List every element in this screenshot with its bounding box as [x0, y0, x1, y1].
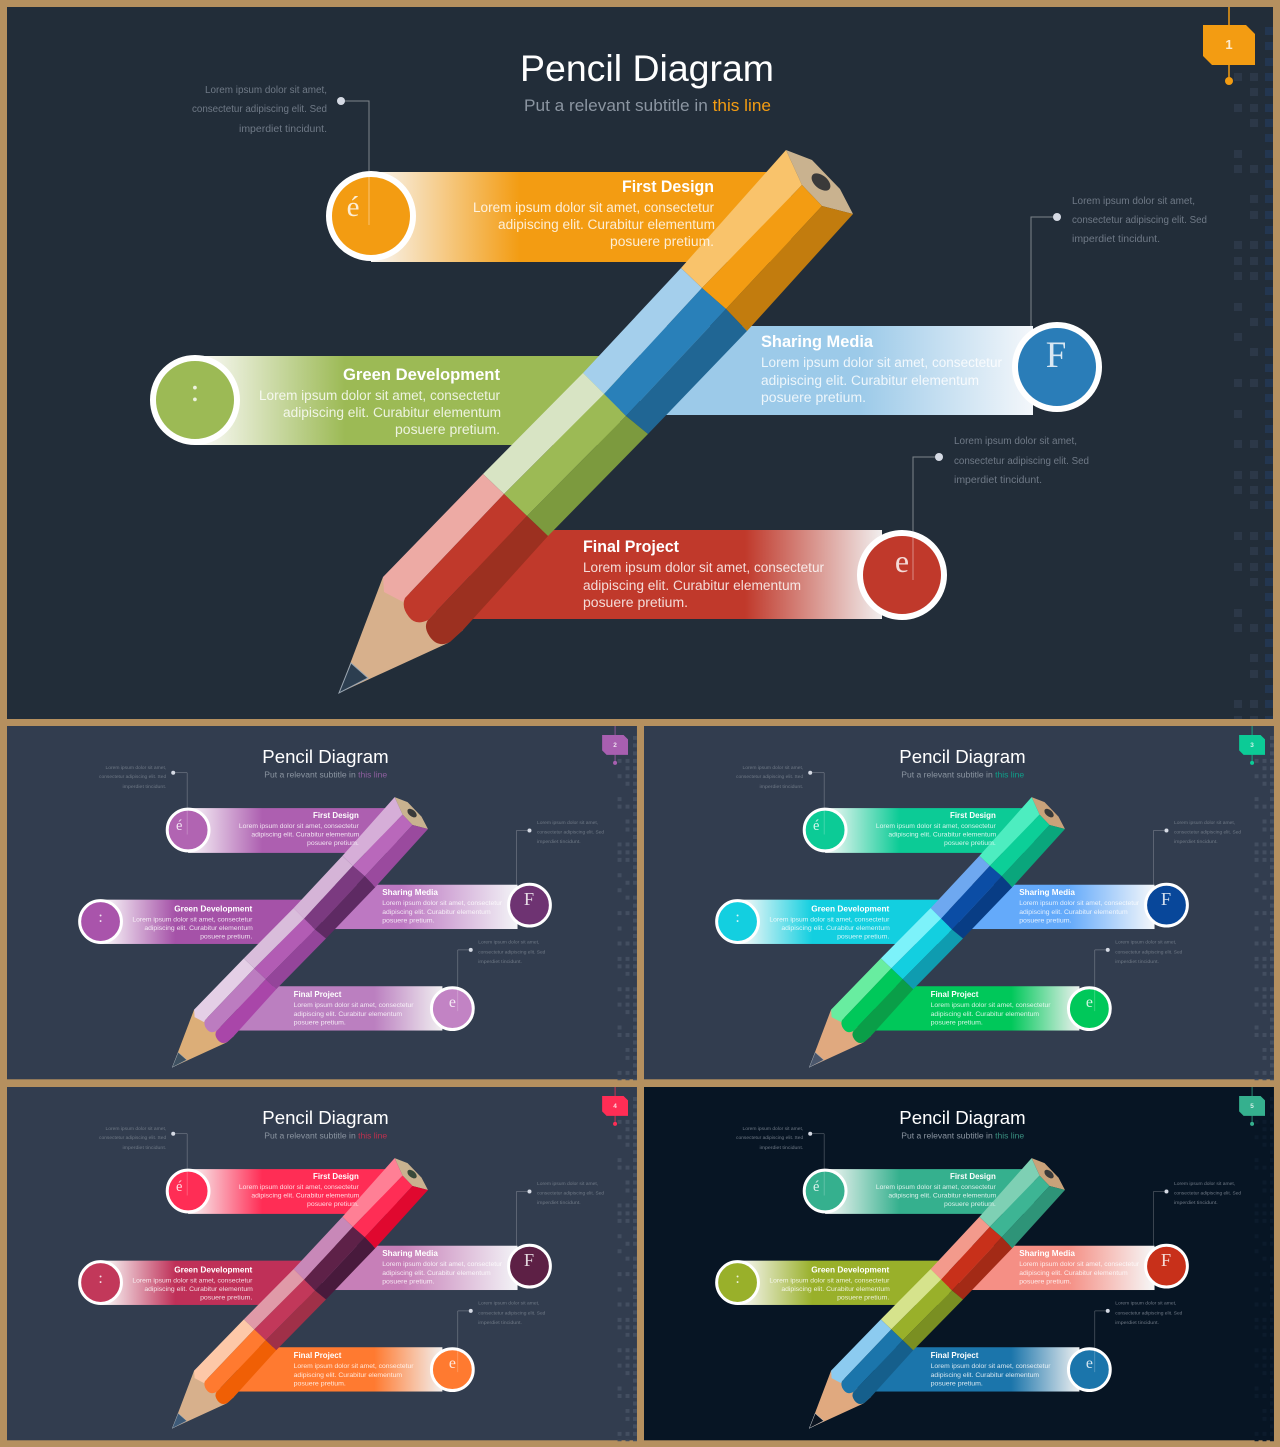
text: First Design: posuere pretium.: [307, 840, 359, 847]
page badge: 3: [1250, 742, 1254, 749]
text: Final Project: adipiscing elit. Curabitur elementum: [294, 1372, 403, 1379]
text: Sharing Media: [1019, 887, 1140, 925]
callout: top left: imperdiet tincidunt.: [122, 1145, 166, 1151]
subtitle: Put a relevant subtitle in this line: [264, 1131, 387, 1141]
callout: lower right: consectetur adipiscing elit. Sed: [1115, 1310, 1183, 1316]
text: First Design: adipiscing elit. Curabitur elementum: [251, 831, 360, 838]
text: Final Project: posuere pretium.: [294, 1020, 346, 1027]
panel: slide 2, purple: [7, 726, 637, 1080]
text: Sharing Media: [761, 332, 1002, 405]
callout: lower right: consectetur adipiscing elit. Sed: [954, 456, 1089, 467]
callout: top left: Lorem ipsum dolor sit amet,: [106, 765, 166, 771]
text: Green Development: posuere pretium.: [200, 1294, 252, 1301]
text: First Design: First Design: [950, 810, 996, 820]
callout: lower right: [478, 1300, 546, 1326]
page badge: [1203, 7, 1255, 85]
title: Pencil Diagram: [262, 1107, 389, 1128]
callout: lower right: Lorem ipsum dolor sit amet,: [1115, 1300, 1176, 1306]
text: First Design: Lorem ipsum dolor sit amet, consectetur: [239, 1184, 360, 1191]
callout: top left: [99, 765, 166, 790]
text: Green Development: Green Development: [174, 1265, 252, 1275]
callout: top left: [192, 85, 327, 135]
ribbon: Final Project: e: [449, 994, 456, 1011]
connector lines: [808, 1132, 1168, 1372]
ribbon: Sharing Media: F: [524, 1250, 534, 1270]
subtitle: Put a relevant subtitle in this line: [901, 770, 1024, 780]
pencil: [172, 797, 428, 1067]
title: Pencil Diagram: [262, 746, 389, 767]
connector lines: [337, 97, 1061, 580]
connector lines: [171, 771, 531, 1011]
callout: lower right: Lorem ipsum dolor sit amet,: [1115, 939, 1176, 945]
ribbon: First Design: é: [347, 191, 359, 223]
callout: lower right: [1115, 1300, 1183, 1326]
callout: top left: Lorem ipsum dolor sit amet,: [743, 1126, 803, 1132]
text: Final Project: Final Project: [294, 1350, 342, 1360]
ribbon: Final Project: [470, 530, 944, 619]
text: First Design: First Design: [950, 1171, 996, 1181]
ribbon: Sharing Media: F: [1161, 1250, 1171, 1270]
text: Green Development: [259, 365, 501, 437]
text: Sharing Media: Lorem ipsum dolor sit amet, consectetur: [1019, 900, 1140, 907]
callout: top left: imperdiet tincidunt.: [759, 1145, 803, 1151]
text: Final Project: [931, 1350, 1051, 1388]
ribbon: First Design: é: [813, 818, 819, 834]
callout: lower right: imperdiet tincidunt.: [1115, 959, 1159, 965]
page badge: [1239, 1087, 1265, 1126]
text: Final Project: posuere pretium.: [294, 1381, 346, 1388]
ribbon: First Design: [167, 1169, 397, 1214]
text: Green Development: adipiscing elit. Curabitur elementum: [144, 925, 253, 932]
text: Final Project: adipiscing elit. Curabitur elementum: [931, 1372, 1040, 1379]
callout: lower right: [1115, 939, 1183, 965]
text: Final Project: Final Project: [931, 989, 979, 999]
text: Final Project: [583, 537, 824, 610]
callout: right: Lorem ipsum dolor sit amet,: [537, 820, 598, 826]
page badge: [602, 726, 628, 765]
text: First Design: Lorem ipsum dolor sit amet, consectetur: [239, 823, 360, 830]
subtitle: Put a relevant subtitle in this line: [524, 96, 771, 115]
text: First Design: adipiscing elit. Curabitur elementum: [888, 1192, 997, 1199]
callout: top left: [736, 765, 803, 790]
ribbon: Sharing Media: [640, 325, 1099, 415]
text: Sharing Media: adipiscing elit. Curabitur elementum: [382, 909, 491, 916]
callout: lower right: imperdiet tincidunt.: [954, 475, 1042, 486]
text: Final Project: adipiscing elit. Curabitur elementum: [931, 1011, 1040, 1018]
page badge: 2: [613, 742, 617, 749]
ribbon: First Design: é: [176, 818, 182, 834]
callout: right: consectetur adipiscing elit. Sed: [1072, 215, 1207, 226]
callout: right: Lorem ipsum dolor sit amet,: [537, 1181, 598, 1187]
callout: right: imperdiet tincidunt.: [1072, 234, 1160, 245]
text: First Design: [473, 177, 715, 249]
callout: right: imperdiet tincidunt.: [537, 1200, 581, 1206]
callout: lower right: [478, 939, 546, 965]
text: First Design: [876, 810, 997, 847]
text: Green Development: Lorem ipsum dolor sit amet, consectetur: [769, 917, 890, 924]
text: Sharing Media: Lorem ipsum dolor sit amet, consectetur: [382, 900, 503, 907]
callout: top left: consectetur adipiscing elit. Sed: [736, 1135, 803, 1141]
text: Sharing Media: posuere pretium.: [382, 918, 435, 925]
text: Sharing Media: Sharing Media: [382, 887, 438, 897]
text: First Design: posuere pretium.: [610, 234, 714, 249]
text: Sharing Media: Sharing Media: [382, 1248, 438, 1258]
ribbon: Green Development: [153, 356, 620, 445]
title: Pencil Diagram: [899, 746, 1026, 767]
pencil: [809, 1158, 1065, 1428]
callout: lower right: imperdiet tincidunt.: [478, 1320, 522, 1326]
callout: top left: Lorem ipsum dolor sit amet,: [743, 765, 803, 771]
text: Sharing Media: posuere pretium.: [761, 390, 866, 405]
callout: lower right: imperdiet tincidunt.: [1115, 1320, 1159, 1326]
callout: right: Lorem ipsum dolor sit amet,: [1072, 196, 1195, 207]
callout: lower right: [954, 436, 1089, 486]
text: Sharing Media: adipiscing elit. Curabitur elementum: [761, 373, 979, 388]
ribbon: First Design: [329, 172, 791, 262]
text: Final Project: Lorem ipsum dolor sit amet, consectetur: [294, 1363, 414, 1370]
ribbon: Sharing Media: F: [524, 889, 534, 909]
pencil: [809, 797, 1065, 1067]
text: Sharing Media: adipiscing elit. Curabitur elementum: [1019, 1270, 1128, 1277]
ribbon: First Design: é: [813, 1179, 819, 1195]
text: First Design: [239, 1171, 360, 1208]
text: First Design: posuere pretium.: [944, 1201, 996, 1208]
ribbon: Green Development: :: [735, 1270, 740, 1287]
ribbon: Sharing Media: [959, 884, 1187, 929]
page badge: 4: [613, 1103, 617, 1110]
text: Green Development: Green Development: [811, 1265, 889, 1275]
callout: right: [1072, 196, 1207, 245]
text: First Design: First Design: [313, 1171, 359, 1181]
callout: lower right: imperdiet tincidunt.: [478, 959, 522, 965]
callout: right: consectetur adipiscing elit. Sed: [537, 1190, 604, 1196]
text: Sharing Media: posuere pretium.: [1019, 1279, 1072, 1286]
text: Green Development: adipiscing elit. Curabitur elementum: [144, 1286, 253, 1293]
text: Green Development: [769, 904, 890, 940]
callout: lower right: consectetur adipiscing elit. Sed: [1115, 949, 1183, 955]
page badge: 5: [1250, 1103, 1254, 1110]
ribbon: First Design: é: [176, 1179, 182, 1195]
text: Green Development: adipiscing elit. Curabitur elementum: [283, 405, 501, 420]
ribbon: First Design: [167, 808, 397, 853]
callout: top left: imperdiet tincidunt.: [122, 784, 166, 790]
text: Sharing Media: posuere pretium.: [1019, 918, 1072, 925]
text: Sharing Media: Sharing Media: [1019, 1248, 1075, 1258]
text: First Design: adipiscing elit. Curabitur elementum: [498, 217, 715, 232]
text: Final Project: Lorem ipsum dolor sit amet, consectetur: [294, 1002, 414, 1009]
title: Pencil Diagram: [520, 48, 774, 89]
ribbon: Final Project: [237, 986, 473, 1031]
callout: top left: consectetur adipiscing elit. Sed: [192, 104, 327, 115]
ribbon: First Design: [804, 1169, 1034, 1214]
text: Green Development: posuere pretium.: [837, 933, 889, 940]
callout: right: [537, 1181, 604, 1206]
text: Green Development: Lorem ipsum dolor sit amet, consectetur: [259, 388, 500, 403]
ribbon: Sharing Media: F: [1046, 335, 1066, 376]
callout: lower right: Lorem ipsum dolor sit amet,: [478, 1300, 539, 1306]
text: Final Project: posuere pretium.: [931, 1020, 983, 1027]
text: Green Development: adipiscing elit. Curabitur elementum: [781, 925, 890, 932]
text: Sharing Media: [1019, 1248, 1140, 1286]
text: Green Development: [769, 1265, 890, 1301]
callout: right: imperdiet tincidunt.: [537, 839, 581, 845]
connector lines: [171, 1132, 531, 1372]
callout: lower right: Lorem ipsum dolor sit amet,: [478, 939, 539, 945]
callout: lower right: consectetur adipiscing elit. Sed: [478, 1310, 546, 1316]
page badge: [602, 1087, 628, 1126]
text: First Design: adipiscing elit. Curabitur elementum: [251, 1192, 360, 1199]
connector lines: [808, 771, 1168, 1011]
text: Final Project: Lorem ipsum dolor sit amet, consectetur: [583, 560, 824, 575]
text: Final Project: Final Project: [294, 989, 342, 999]
text: Final Project: Lorem ipsum dolor sit amet, consectetur: [931, 1002, 1051, 1009]
ribbon: Final Project: [237, 1347, 473, 1392]
ribbon: First Design: [804, 808, 1034, 853]
callout: right: consectetur adipiscing elit. Sed: [537, 829, 604, 835]
text: Sharing Media: [382, 1248, 503, 1286]
text: Green Development: posuere pretium.: [200, 933, 252, 940]
callout: top left: Lorem ipsum dolor sit amet,: [205, 85, 327, 96]
text: Sharing Media: [382, 887, 503, 925]
callout: right: [1174, 820, 1241, 845]
text: First Design: First Design: [622, 177, 714, 196]
callout: lower right: Lorem ipsum dolor sit amet,: [954, 436, 1077, 447]
ribbon: Sharing Media: [959, 1245, 1187, 1290]
text: First Design: Lorem ipsum dolor sit amet, consectetur: [876, 823, 997, 830]
text: Sharing Media: Lorem ipsum dolor sit amet, consectetur: [382, 1261, 503, 1268]
text: Final Project: Final Project: [931, 1350, 979, 1360]
subtitle: Put a relevant subtitle in this line: [264, 770, 387, 780]
text: Final Project: Lorem ipsum dolor sit amet, consectetur: [931, 1363, 1051, 1370]
text: Sharing Media: Lorem ipsum dolor sit amet, consectetur: [1019, 1261, 1140, 1268]
callout: right: consectetur adipiscing elit. Sed: [1174, 829, 1241, 835]
ribbon: Green Development: :: [191, 372, 199, 408]
text: First Design: posuere pretium.: [944, 840, 996, 847]
subtitle: Put a relevant subtitle in this line: [901, 1131, 1024, 1141]
text: First Design: posuere pretium.: [307, 1201, 359, 1208]
callout: lower right: consectetur adipiscing elit. Sed: [478, 949, 546, 955]
text: Final Project: adipiscing elit. Curabitur elementum: [294, 1011, 403, 1018]
text: Sharing Media: Lorem ipsum dolor sit amet, consectetur: [761, 355, 1002, 370]
text: Green Development: Green Development: [343, 365, 500, 384]
text: Sharing Media: posuere pretium.: [382, 1279, 435, 1286]
text: First Design: First Design: [313, 810, 359, 820]
page badge: [1239, 726, 1265, 765]
text: First Design: Lorem ipsum dolor sit amet, consectetur: [473, 200, 714, 215]
text: Green Development: Lorem ipsum dolor sit amet, consectetur: [769, 1278, 890, 1285]
callout: right: imperdiet tincidunt.: [1174, 1200, 1218, 1206]
callout: right: Lorem ipsum dolor sit amet,: [1174, 1181, 1235, 1187]
callout: top left: imperdiet tincidunt.: [759, 784, 803, 790]
text: First Design: Lorem ipsum dolor sit amet, consectetur: [876, 1184, 997, 1191]
text: Green Development: [132, 1265, 253, 1301]
callout: top left: consectetur adipiscing elit. Sed: [736, 774, 803, 780]
text: Final Project: [294, 989, 414, 1027]
text: Sharing Media: adipiscing elit. Curabitur elementum: [382, 1270, 491, 1277]
text: First Design: [876, 1171, 997, 1208]
text: Green Development: adipiscing elit. Curabitur elementum: [781, 1286, 890, 1293]
text: Final Project: Final Project: [583, 537, 679, 556]
text: First Design: [239, 810, 360, 847]
ribbon: Green Development: [80, 1261, 312, 1305]
text: Green Development: posuere pretium.: [837, 1294, 889, 1301]
text: Green Development: Green Development: [811, 904, 889, 914]
text: Sharing Media: Sharing Media: [761, 332, 874, 351]
callout: top left: consectetur adipiscing elit. Sed: [99, 1135, 166, 1141]
ribbon: Final Project: e: [449, 1355, 456, 1372]
ribbon: Final Project: e: [1086, 1355, 1093, 1372]
text: Final Project: posuere pretium.: [931, 1381, 983, 1388]
text: Final Project: adipiscing elit. Curabitur elementum: [583, 578, 801, 593]
panel: slide 3, teal and blue: [644, 726, 1274, 1080]
ribbon: Sharing Media: [322, 884, 550, 929]
title: Pencil Diagram: [899, 1107, 1026, 1128]
text: Green Development: [132, 904, 253, 940]
callout: top left: [99, 1126, 166, 1151]
panel: main slide, orange: [7, 7, 1273, 719]
text: Green Development: Lorem ipsum dolor sit amet, consectetur: [132, 1278, 253, 1285]
callout: right: [537, 820, 604, 845]
callout: right: imperdiet tincidunt.: [1174, 839, 1218, 845]
ribbon: Final Project: e: [895, 543, 909, 579]
text: Green Development: posuere pretium.: [395, 422, 500, 437]
ribbon: Final Project: [874, 986, 1110, 1031]
ribbon: Green Development: [717, 900, 949, 944]
callout: top left: Lorem ipsum dolor sit amet,: [106, 1126, 166, 1132]
callout: top left: [736, 1126, 803, 1151]
pencil: [172, 1158, 428, 1428]
text: Green Development: Green Development: [174, 904, 252, 914]
text: Final Project: [931, 989, 1051, 1027]
callout: right: Lorem ipsum dolor sit amet,: [1174, 820, 1235, 826]
callout: right: consectetur adipiscing elit. Sed: [1174, 1190, 1241, 1196]
ribbon: Green Development: :: [98, 1270, 103, 1287]
text: Sharing Media: Sharing Media: [1019, 887, 1075, 897]
ribbon: Final Project: [874, 1347, 1110, 1392]
pencil: [339, 150, 853, 693]
text: First Design: adipiscing elit. Curabitur elementum: [888, 831, 997, 838]
text: Green Development: Lorem ipsum dolor sit amet, consectetur: [132, 917, 253, 924]
text: Sharing Media: adipiscing elit. Curabitur elementum: [1019, 909, 1128, 916]
ribbon: Sharing Media: F: [1161, 889, 1171, 909]
ribbon: Final Project: e: [1086, 994, 1093, 1011]
ribbon: Green Development: [717, 1261, 949, 1305]
ribbon: Green Development: [80, 900, 312, 944]
ribbon: Green Development: :: [98, 909, 103, 926]
ribbon: Sharing Media: [322, 1245, 550, 1290]
panel: slide 4, red and orange: [7, 1087, 637, 1441]
callout: top left: imperdiet tincidunt.: [239, 124, 327, 135]
text: Final Project: [294, 1350, 414, 1388]
callout: right: [1174, 1181, 1241, 1206]
panel: slide 5, dark navy: [644, 1087, 1274, 1441]
page badge: 1: [1225, 37, 1233, 52]
text: Final Project: posuere pretium.: [583, 595, 688, 610]
ribbon: Green Development: :: [735, 909, 740, 926]
callout: top left: consectetur adipiscing elit. Sed: [99, 774, 166, 780]
